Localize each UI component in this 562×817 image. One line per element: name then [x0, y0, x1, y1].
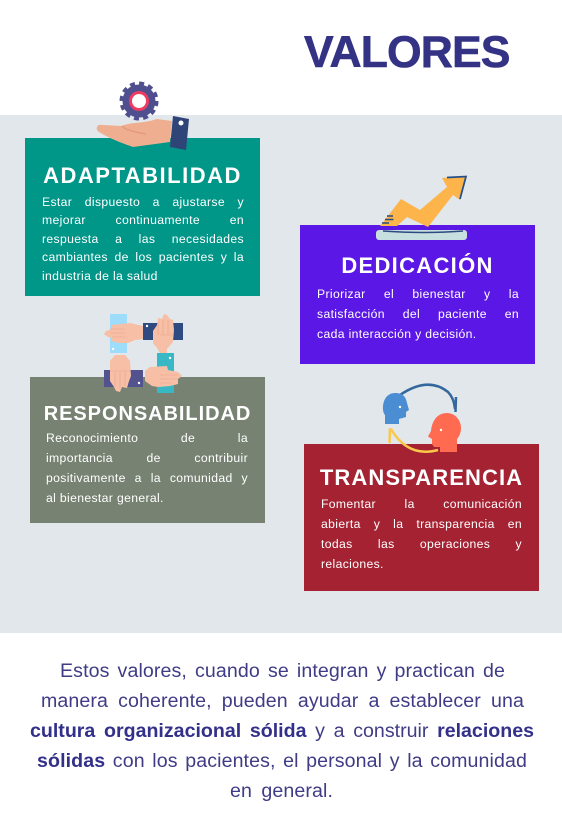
text: dedicacion: Priorizar el bienestar y la: [317, 287, 519, 301]
text: adaptabilidad: respuesta a las necesidades: [42, 232, 244, 246]
heading: transparencia: TRANSPARENCIA: [320, 465, 523, 490]
title: VALORES: [304, 28, 510, 77]
text: responsabilidad: importancia de contribuir: [46, 451, 248, 465]
closing text: en general.: [230, 780, 333, 802]
closing text: sólidas con los pacientes, el personal y la comunidad: [37, 750, 527, 772]
text: adaptabilidad: Estar dispuesto a ajustarse y: [42, 195, 244, 209]
closing text: manera coherente, pueden ayudar a establecer una: [41, 690, 524, 712]
text: dedicacion: satisfacción del paciente en: [317, 307, 519, 321]
heading: responsabilidad: RESPONSABILIDAD: [44, 403, 251, 425]
text: adaptabilidad: industria de la salud: [42, 269, 158, 283]
text: dedicacion: cada interacción y decisión.: [317, 327, 477, 341]
icon: heads exchanging: [383, 385, 461, 452]
text: responsabilidad: [46, 431, 248, 505]
text: responsabilidad: Reconocimiento de la: [46, 431, 248, 445]
text: adaptabilidad: cambiantes de los pacientes y la: [42, 250, 244, 264]
icon: four linked hands: [104, 314, 183, 393]
closing text: cultura organizacional sólida y a construir relaciones: [30, 720, 534, 742]
text: transparencia: Fomentar la comunicación: [321, 497, 522, 511]
text: responsabilidad: al bienestar general.: [46, 491, 164, 505]
text: responsabilidad: positivamente a la comunidad y: [46, 471, 248, 485]
icon: rising arrow: [376, 176, 467, 240]
text: transparencia: abierta y la transparencia en: [321, 517, 522, 531]
text: transparencia: todas las operaciones y: [321, 537, 522, 551]
text: transparencia: [321, 497, 522, 571]
text: adaptabilidad: mejorar continuamente en: [42, 213, 244, 227]
panel: dedicacion: [300, 225, 535, 364]
closing text: [30, 660, 534, 802]
icon: hand with gear: [97, 84, 189, 150]
text: dedicacion: [317, 287, 519, 341]
text: transparencia: relaciones.: [321, 557, 384, 571]
panel: adaptabilidad: [25, 138, 260, 296]
heading: dedicacion: DEDICACIÓN: [341, 253, 494, 278]
closing text: Estos valores, cuando se integran y practican de: [60, 660, 505, 682]
panel: transparencia: [304, 444, 539, 591]
panel: responsabilidad: [30, 377, 265, 523]
background band: [0, 115, 562, 633]
text: adaptabilidad: [42, 195, 244, 283]
heading: adaptabilidad: ADAPTABILIDAD: [43, 163, 242, 188]
